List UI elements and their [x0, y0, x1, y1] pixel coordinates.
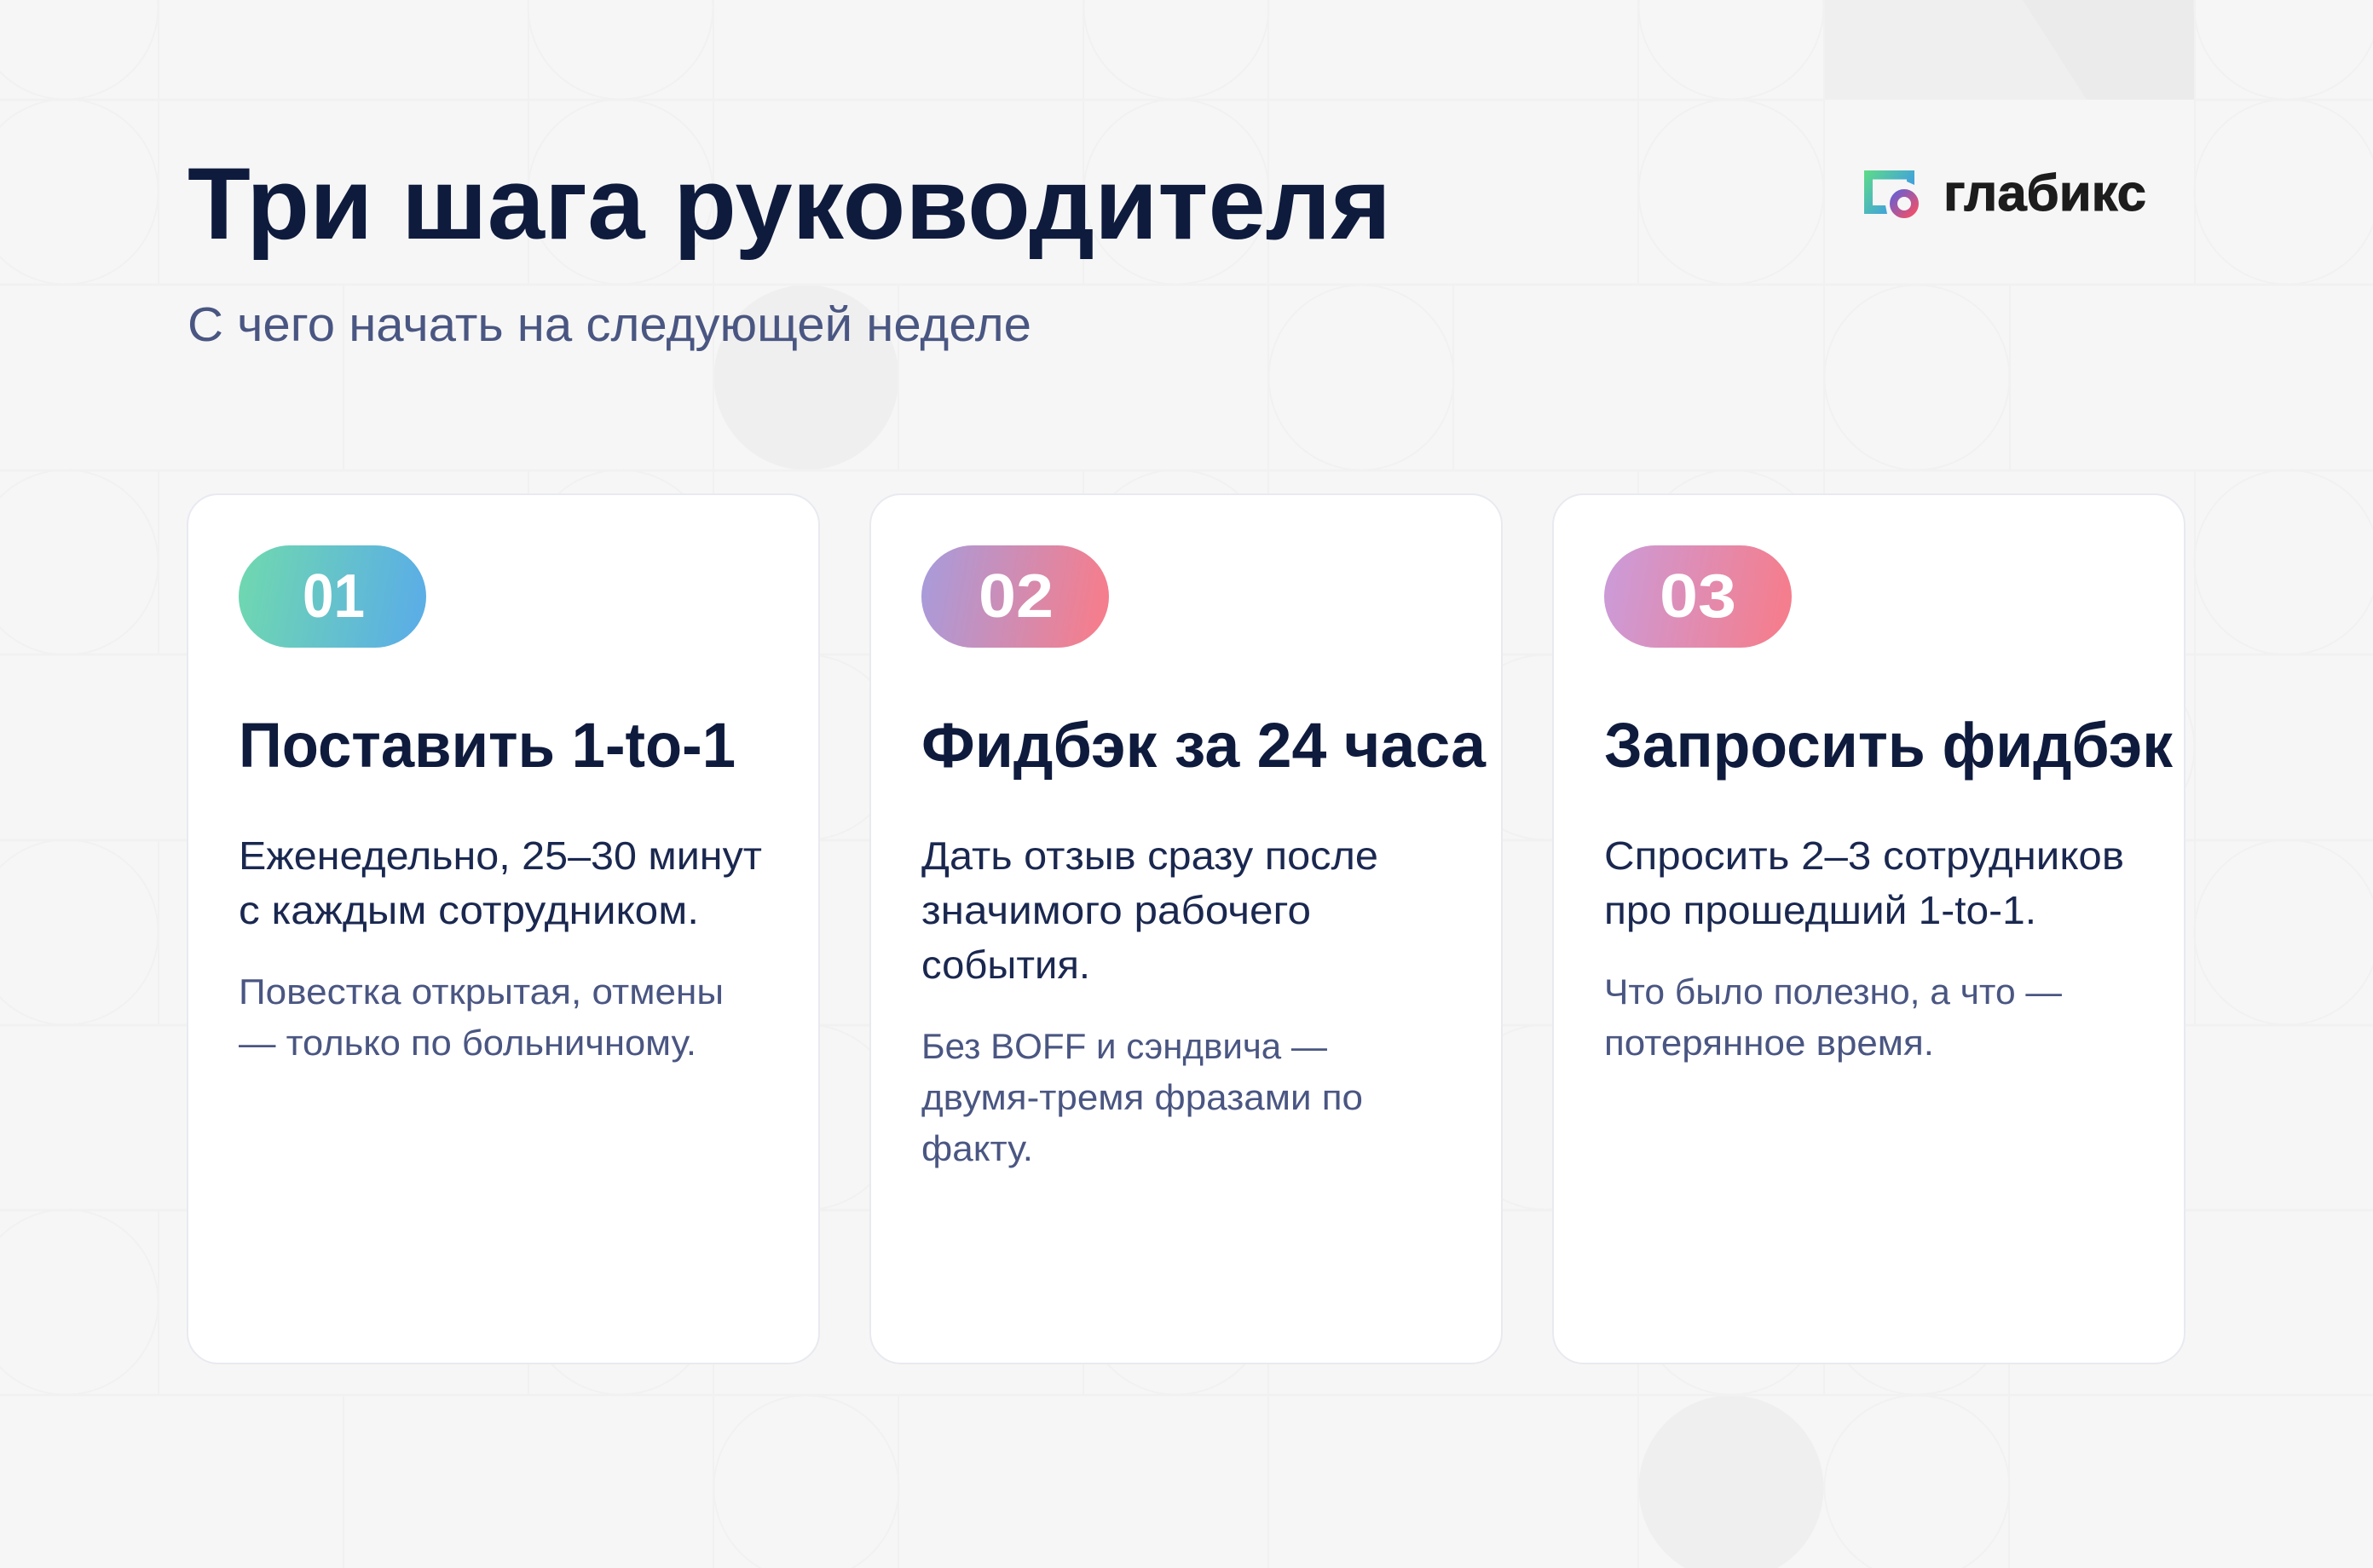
- step 1 body: [239, 833, 762, 932]
- step 2 body: Дать отзыв сразу после: [921, 833, 1378, 878]
- step 2 note: Без BOFF и сэндвича —: [921, 1026, 1327, 1066]
- logo wordmark: глабикс: [1943, 164, 2146, 222]
- step 2 body: события.: [921, 943, 1090, 987]
- step 1 heading: Поставить 1-to-1: [239, 710, 736, 781]
- step 3 note: потерянное время.: [1604, 1023, 1934, 1063]
- subtitle: С чего начать на следующей неделе: [188, 297, 1031, 352]
- step 2 note: [921, 1026, 1363, 1168]
- step 1 number badge: [239, 545, 426, 648]
- icon: logo mark: [1864, 170, 1914, 215]
- step 2 note: факту.: [921, 1128, 1033, 1168]
- step 1 note: — только по больничному.: [239, 1023, 696, 1063]
- step 1 body: с каждым сотрудником.: [239, 888, 699, 932]
- step 3 body: [1604, 833, 2124, 932]
- step 2 heading: Фидбэк за 24 часа: [921, 710, 1487, 781]
- step 3 body: про прошедший 1-to-1.: [1604, 888, 2036, 932]
- step 2 note: двумя-тремя фразами по: [921, 1077, 1363, 1117]
- step 2 body: значимого рабочего: [921, 888, 1311, 932]
- step 3 heading: Запросить фидбэк: [1604, 710, 2174, 781]
- logo: [1864, 164, 2146, 222]
- step 1 note: Повестка открытая, отмены: [239, 971, 724, 1012]
- panel: step 2: [870, 494, 1502, 1363]
- title: Три шага руководителя: [188, 147, 1391, 261]
- step 1 number badge: 01: [303, 562, 365, 631]
- panel: step 1: [188, 494, 819, 1363]
- step 2 body: [921, 833, 1378, 987]
- step 2 number badge: 02: [979, 562, 1054, 631]
- step 3 note: Что было полезно, а что —: [1604, 971, 2062, 1012]
- step 3 note: [1604, 971, 2062, 1063]
- step 1 note: [239, 971, 724, 1063]
- panel: step 3: [1553, 494, 2185, 1363]
- step 3 number badge: [1604, 545, 1792, 648]
- step 3 body: Спросить 2–3 сотрудников: [1604, 833, 2124, 878]
- step 3 number badge: 03: [1660, 562, 1736, 631]
- step 2 number badge: [921, 545, 1109, 648]
- step 1 body: Еженедельно, 25–30 минут: [239, 833, 762, 878]
